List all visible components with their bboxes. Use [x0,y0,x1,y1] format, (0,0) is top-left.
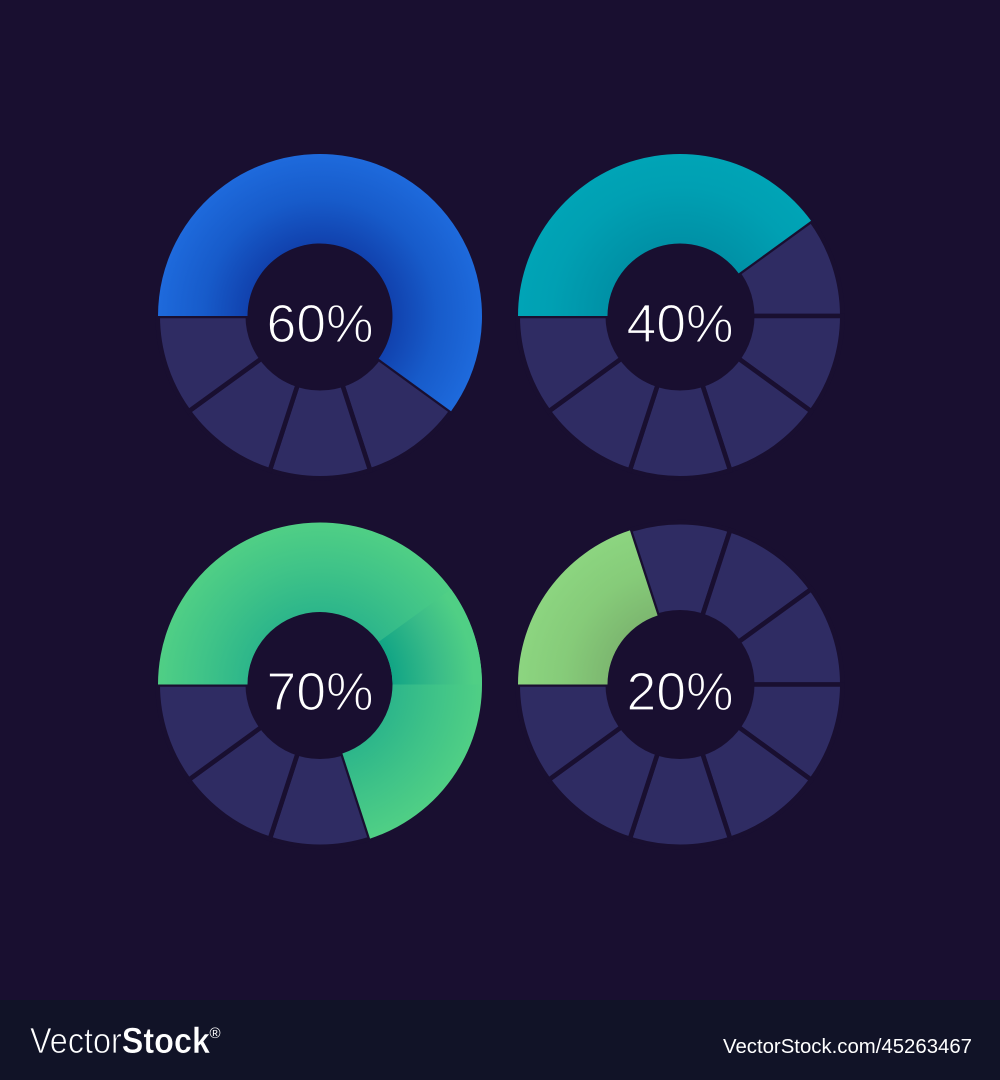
filled arc: 40% teal [518,154,811,316]
inner circle [246,610,394,759]
value label: 40%: 40% [626,295,734,354]
footer logo: VectorStock: VectorStock [30,1020,211,1061]
remaining segments [493,221,867,500]
inner circle [246,242,394,390]
donut chart: 20% [493,501,867,868]
remaining segments [493,501,867,868]
remaining segments [133,607,370,868]
filled arc: 70% green [158,522,482,839]
donut chart: 70% [133,522,482,868]
filled arc: 20% light green [518,530,658,684]
donut chart: 60% [133,154,482,500]
value label: 20%: 20% [626,663,734,722]
inner circle [606,610,754,759]
filled arc: 60% blue [158,154,482,411]
value label: 70%: 70% [266,663,374,722]
inner circle [606,242,754,390]
value label: 60%: 60% [266,295,374,354]
footer image id: VectorStock.com/45263467 [723,1036,972,1058]
footer bar [0,1000,1000,1080]
donut chart: 40% [493,154,867,500]
footer logo: registered mark: ® [210,1025,221,1042]
remaining segments [133,239,451,500]
